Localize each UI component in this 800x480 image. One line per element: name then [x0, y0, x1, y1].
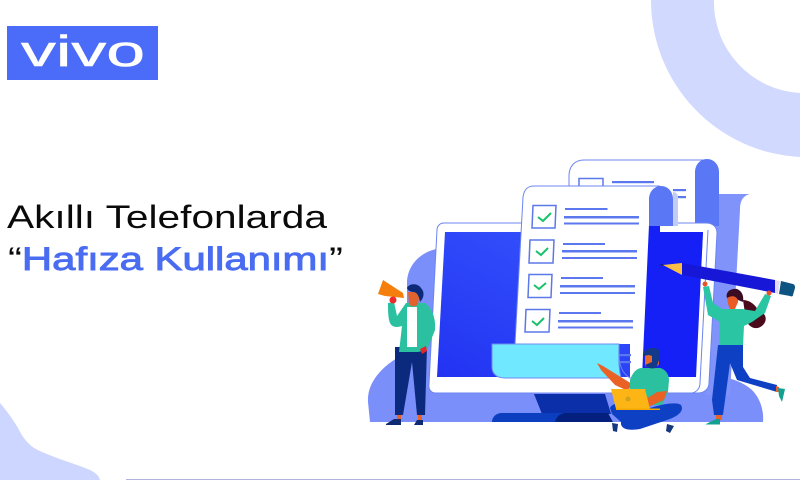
paper cyan fold [492, 344, 621, 378]
decorative blob: bottom left [0, 403, 100, 480]
checklist row 2 [529, 240, 637, 263]
illustration: task checklist team [368, 159, 795, 433]
title: Akıllı Telefonlarda [7, 199, 328, 235]
person: man with megaphone [378, 280, 435, 425]
pencil [659, 263, 795, 296]
person: woman holding pencil [702, 282, 785, 424]
back paper [569, 159, 719, 230]
monitor stand [492, 394, 613, 422]
logo: vivo: vivo [21, 27, 145, 76]
checklist row 4 [525, 310, 633, 332]
front paper [492, 186, 703, 378]
decorative ring: top right [651, 0, 800, 157]
checklist row 1 [532, 206, 639, 228]
title: “Hafıza Kullanımı ” [8, 241, 343, 277]
logo: vivo [7, 26, 158, 80]
background blob [368, 249, 763, 422]
bottom rule [126, 479, 800, 480]
title [7, 199, 343, 277]
back scroll strip [700, 194, 750, 395]
checklist row 3 [528, 274, 635, 298]
monitor [429, 223, 717, 393]
person: seated man with laptop [597, 348, 682, 433]
